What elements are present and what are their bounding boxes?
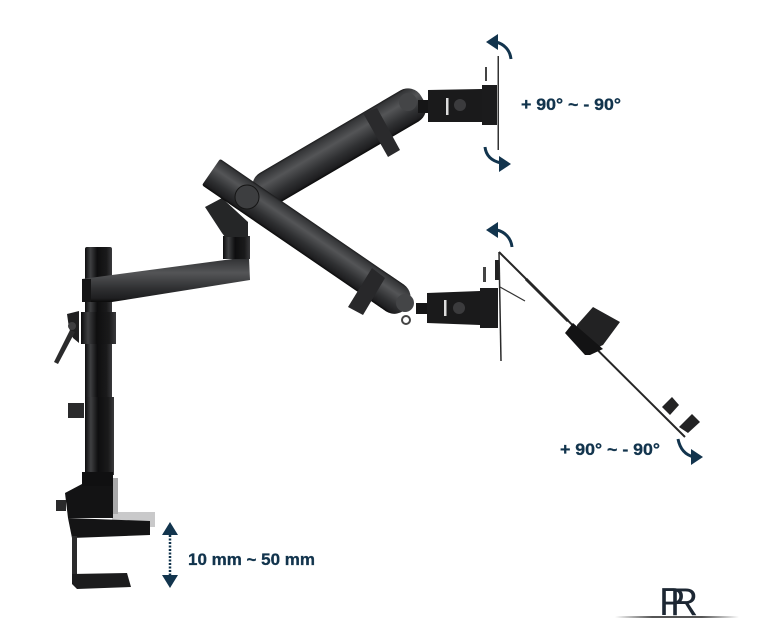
- lower monitor mount: [416, 252, 525, 361]
- tilted monitor plate: [499, 252, 700, 437]
- lower angle label: + 90° ~ - 90°: [560, 440, 660, 459]
- desk clamp: [56, 478, 155, 589]
- upper arm: [247, 83, 432, 212]
- pivot cap: [235, 185, 259, 209]
- clamp thickness label: 10 mm ~ 50 mm: [188, 550, 315, 569]
- logo: R: [670, 581, 698, 624]
- logo: P: [659, 581, 685, 624]
- monitor arm assembly: [54, 83, 432, 589]
- vertical post: [68, 247, 116, 486]
- logo: [615, 581, 739, 624]
- upper monitor mount: [418, 56, 499, 150]
- lower arm: [202, 159, 416, 324]
- upper rotation arrows: [485, 34, 511, 172]
- lower horizontal arm: [82, 257, 250, 302]
- locking lever: [54, 311, 79, 364]
- lower rotation arrows: [486, 222, 703, 465]
- clamp thickness arrow: [162, 522, 178, 588]
- upper angle label: + 90° ~ - 90°: [521, 95, 621, 114]
- elbow joint: [205, 198, 250, 259]
